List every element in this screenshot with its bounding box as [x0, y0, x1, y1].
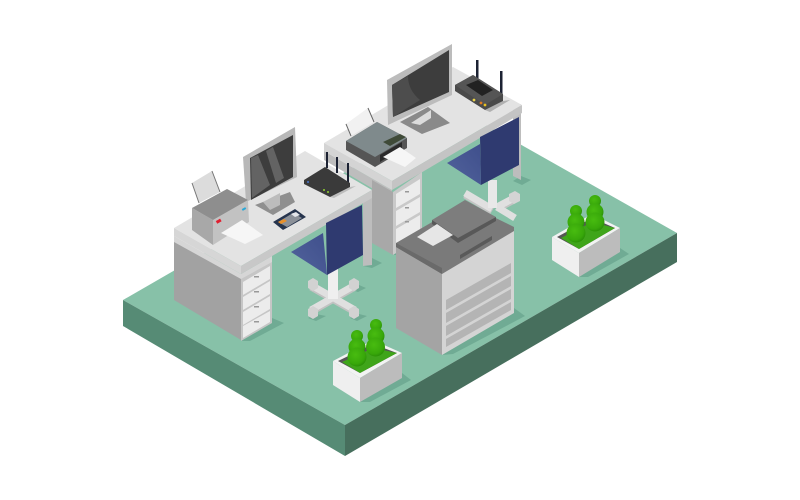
chair 1 [291, 205, 363, 319]
photocopier [396, 200, 514, 355]
calculator [273, 209, 306, 230]
tree [366, 319, 385, 356]
router 1 [304, 152, 356, 198]
tree [566, 205, 586, 242]
floor shadows [241, 176, 629, 402]
floor platform [123, 108, 677, 456]
planter left [333, 319, 402, 402]
printer 2 [346, 108, 416, 167]
router 2 [455, 60, 510, 112]
tree [586, 195, 604, 232]
copier paper [417, 224, 453, 246]
desk 2 drawer unit [372, 172, 422, 255]
printer 1 [192, 171, 263, 245]
planter right [552, 195, 620, 277]
desk 1 [174, 151, 372, 341]
copier paper trays [446, 263, 511, 347]
desk 2 back edge strip [324, 151, 392, 200]
monitor 1 [243, 127, 297, 215]
chair feet [308, 278, 359, 319]
chair 2 [447, 117, 520, 218]
desk 2 [324, 67, 522, 255]
monitor 2 [387, 44, 452, 134]
desk 1 drawer unit [174, 240, 272, 341]
tree [348, 330, 366, 366]
